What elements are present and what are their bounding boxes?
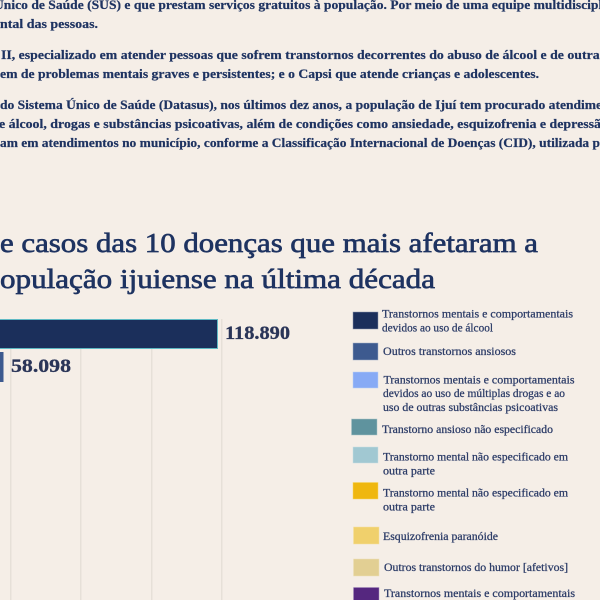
legend item 3: devidos ao uso de múltiplas drogas e ao	[383, 388, 565, 400]
legend item 3: uso de outras substâncias psicoativas	[383, 402, 559, 414]
value: 58.098: 58.098	[11, 356, 71, 377]
legend item 6: Transtorno mental não especificado em	[383, 488, 568, 500]
legend item 4: Transtorno ansioso não especificado	[382, 424, 553, 436]
legend item 8: Outros transtornos do humor [afetivos]	[384, 562, 568, 574]
value: 118.890: 118.890	[225, 323, 290, 344]
legend item 1: devidos ao uso de álcool	[382, 322, 493, 334]
intro text block: ntal das pessoas.	[0, 17, 98, 31]
legend item 6	[353, 482, 568, 514]
legend item 6: outra parte	[383, 502, 435, 514]
legend item 9: Transtornos mentais e comportamentais	[384, 588, 576, 600]
chart title	[0, 228, 538, 294]
legend item 1: Transtornos mentais e comportamentais	[382, 308, 574, 320]
legend item 4	[352, 419, 553, 436]
bar: outros transtornos ansiosos	[0, 352, 4, 382]
legend item 5	[353, 447, 568, 478]
intro text block	[0, 0, 600, 150]
legend item 2: Outros transtornos ansiosos	[383, 346, 517, 358]
bar chart	[0, 319, 290, 600]
chart title: opulação ijuiense na última década	[0, 264, 435, 294]
legend item 2	[353, 343, 517, 360]
bar: transtornos por álcool	[0, 320, 218, 348]
intro text block: II, especializado em atender pessoas que sofrem transtornos decorrentes do abuso de álcool e de outras	[1, 48, 600, 62]
intro text block: am em atendimentos no município, conforme a Classificação Internacional de Doenças (CID), utilizada p	[0, 136, 600, 150]
intro text block: do Sistema Único de Saúde (Datasus), nos últimos dez anos, a população de Ijuí tem procurado atendime	[0, 98, 600, 112]
chart title: e casos das 10 doenças que mais afetaram a	[0, 228, 538, 258]
intro text block: e álcool, drogas e substâncias psicoativas, além de condições como ansiedade, esquizofrenia e depressã	[0, 117, 600, 131]
legend item 5: outra parte	[383, 466, 435, 478]
legend	[352, 308, 576, 600]
legend item 7	[354, 527, 498, 544]
legend item 3	[353, 372, 575, 414]
intro text block: em de problemas mentais graves e persistentes; e o Capsi que atende crianças e adolescentes.	[0, 67, 539, 81]
legend item 5: Transtorno mental não especificado em	[383, 452, 568, 464]
legend item 8	[354, 559, 568, 576]
legend item 3: Transtornos mentais e comportamentais	[384, 374, 575, 386]
legend item 1	[353, 308, 574, 334]
legend item 7: Esquizofrenia paranóide	[383, 531, 498, 543]
